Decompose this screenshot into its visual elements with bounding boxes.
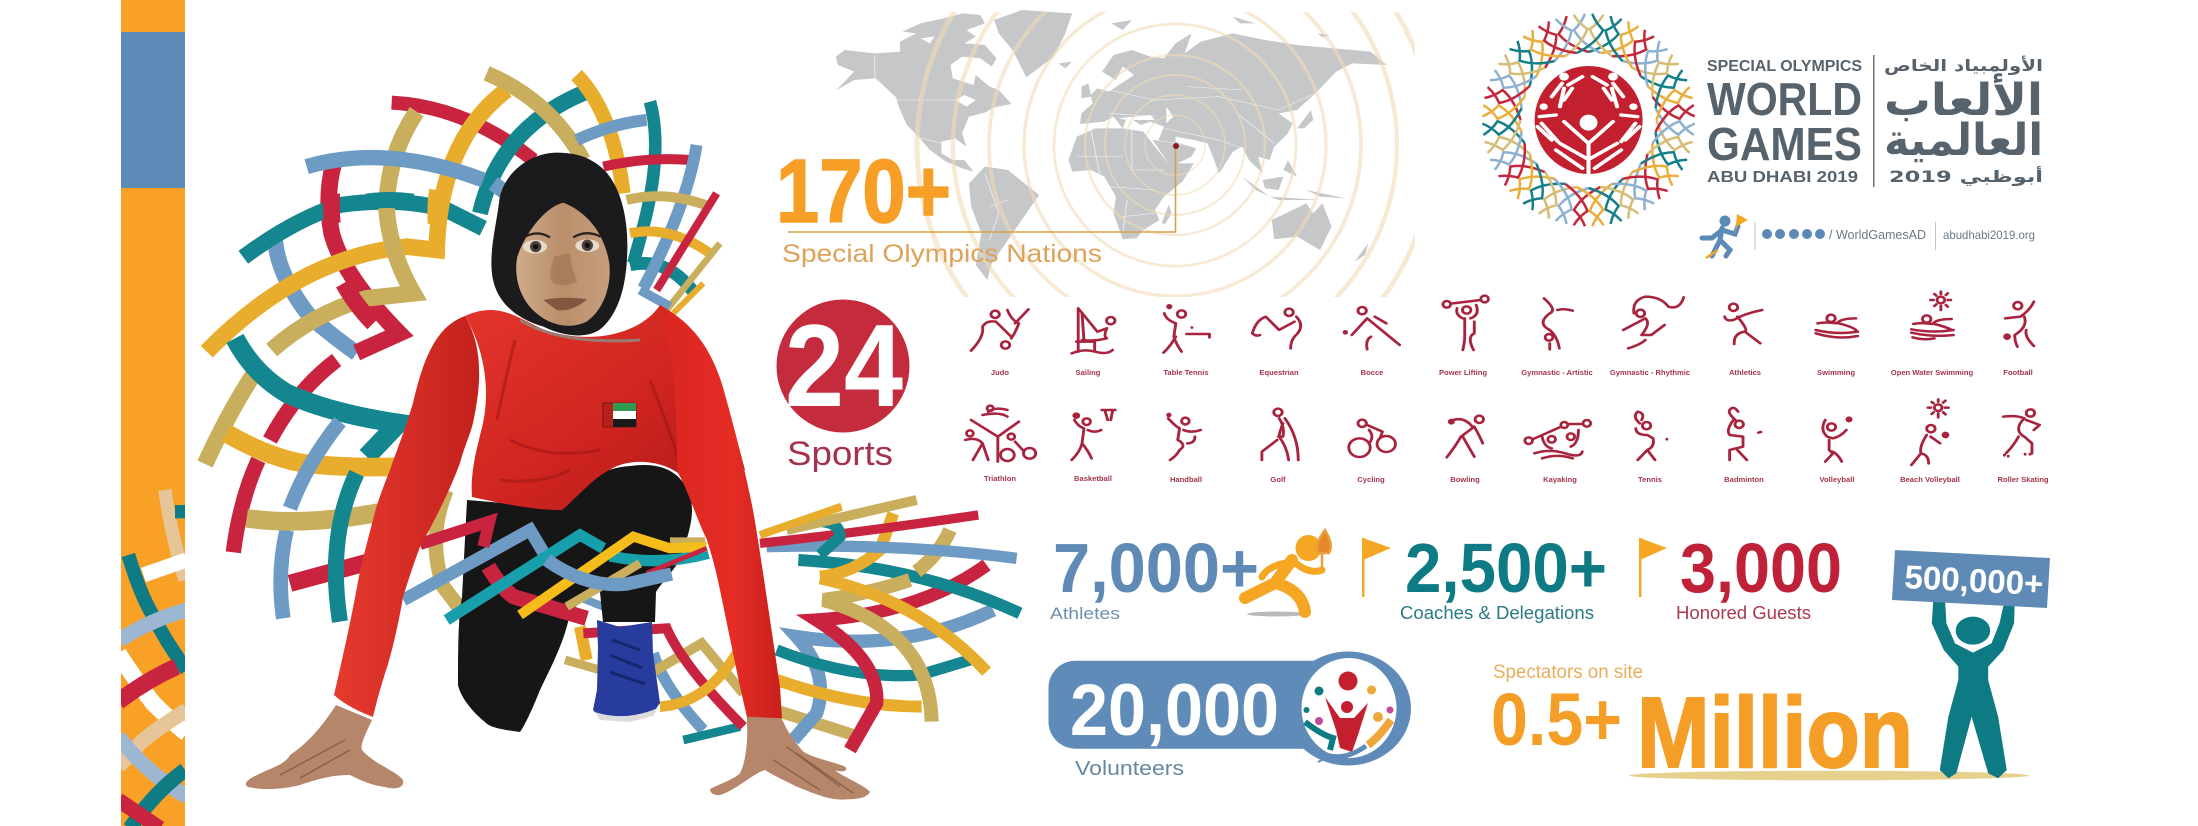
- face: [516, 203, 610, 326]
- person holding sign: [1892, 550, 2050, 778]
- icon: handball: [1166, 413, 1201, 460]
- right arm: [660, 305, 782, 719]
- icon: gymnastic rhythmic: [1623, 297, 1684, 348]
- Arabic wordmark: أبوظبي 2019: [1889, 166, 2043, 187]
- sign text: 500,000+: [1904, 558, 2044, 602]
- coaches number: 2,500+: [1405, 529, 1607, 607]
- spectators stat: [1491, 662, 2029, 789]
- English wordmark: WORLD: [1707, 73, 1862, 125]
- English wordmark: SPECIAL OLYMPICS: [1707, 58, 1862, 75]
- volunteers stat: [1048, 652, 1411, 780]
- sports labels: Cycling: [1357, 475, 1385, 484]
- continents: [836, 10, 1387, 280]
- guests caption: Honored Guests: [1676, 603, 1811, 623]
- sports labels: Judo: [991, 368, 1009, 377]
- sports labels: Swimming: [1817, 368, 1855, 377]
- sports caption: Sports: [787, 435, 893, 473]
- icon: cycling: [1349, 420, 1395, 457]
- volunteers caption: Volunteers: [1075, 758, 1184, 780]
- front ribbons over legs: [403, 522, 708, 620]
- social icons: [1762, 229, 1825, 239]
- volunteers icon: [1304, 672, 1394, 762]
- icon: tennis: [1635, 412, 1667, 460]
- social handle: / WorldGamesAD: [1829, 227, 1926, 242]
- spectators caption: Spectators on site: [1493, 662, 1643, 683]
- website: abudhabi2019.org: [1943, 228, 2035, 242]
- sports labels: Golf: [1270, 475, 1286, 484]
- coaches caption: Coaches & Delegations: [1400, 603, 1594, 623]
- right wing ribbons: [760, 500, 1020, 750]
- number 24: 24: [785, 300, 903, 431]
- sports labels: Gymnastic - Rhythmic: [1610, 368, 1690, 377]
- sports labels: Kayaking: [1543, 475, 1577, 484]
- flag patch: [603, 403, 636, 427]
- upper ribbons: [207, 73, 720, 353]
- runner with flag icon: [1702, 214, 1748, 258]
- icon: bocce: [1343, 307, 1400, 349]
- Abu Dhabi marker dot: [1173, 143, 1179, 149]
- wordmark divider: [1873, 55, 1874, 187]
- pill: [1048, 661, 1348, 749]
- Arabic wordmark: العالمية: [1884, 115, 2043, 166]
- icon: flag: [1362, 538, 1391, 597]
- sports labels: Football: [2003, 368, 2033, 377]
- guests stat: [1639, 529, 1842, 623]
- nations caption: Special Olympics Nations: [782, 240, 1102, 268]
- running shoe: [593, 620, 660, 722]
- icon: golf: [1262, 409, 1298, 460]
- sports labels: [984, 368, 2049, 484]
- sports labels: Badminton: [1724, 475, 1764, 484]
- English wordmark: ABU DHABI 2019: [1707, 169, 1858, 186]
- 24 sports badge: [776, 300, 910, 473]
- icon: open water swimming: [1911, 292, 1953, 339]
- sports labels: Athletics: [1729, 368, 1761, 377]
- sports labels: Bocce: [1361, 368, 1383, 377]
- body: [1932, 600, 2015, 778]
- sports labels: Table Tennis: [1163, 368, 1209, 377]
- icon: kayaking: [1525, 420, 1591, 458]
- icon: judo: [971, 309, 1028, 351]
- icon: volleyball: [1823, 416, 1852, 462]
- icon: gymnastic artistic: [1543, 298, 1573, 349]
- Million word: Million: [1637, 677, 1913, 789]
- icon: badminton: [1728, 408, 1761, 460]
- eyes and brows: [523, 233, 601, 253]
- icon: torch runner: [1245, 530, 1331, 616]
- social dividers: [1755, 222, 1936, 250]
- woven ring: [1481, 12, 1697, 228]
- icon: bowling: [1447, 416, 1483, 457]
- icon: sailing: [1072, 308, 1115, 353]
- ground shadow: [1629, 771, 2029, 780]
- torso: [465, 305, 745, 510]
- sports labels: Handball: [1170, 475, 1202, 484]
- ribbon fan behind athlete: [205, 73, 1020, 750]
- sports labels: Bowling: [1450, 475, 1480, 484]
- bar ribbon pattern: [118, 490, 187, 826]
- icon: football: [2003, 302, 2034, 347]
- 0.5+ number: 0.5+: [1491, 678, 1622, 761]
- sports labels: Volleyball: [1820, 475, 1854, 484]
- coaches stat: [1362, 529, 1607, 623]
- icon: triathlon: [965, 406, 1036, 462]
- Arabic wordmark: [1884, 56, 2043, 187]
- head with hijab: [491, 153, 627, 335]
- left sleeve: [334, 316, 479, 717]
- icon: basketball: [1072, 410, 1115, 460]
- Arabic wordmark: الألعاب: [1884, 73, 2043, 126]
- English wordmark: GAMES: [1707, 118, 1862, 170]
- world map: [788, 10, 1415, 297]
- right hand: [710, 717, 870, 800]
- concentric rings: [914, 12, 1415, 297]
- icon: table tennis: [1164, 304, 1209, 353]
- English wordmark: [1707, 58, 1862, 186]
- sports labels: Equestrian: [1259, 368, 1299, 377]
- sports labels: Gymnastic - Artistic: [1521, 368, 1593, 377]
- guests number: 3,000: [1680, 529, 1842, 607]
- ring centre: [1302, 658, 1396, 758]
- red emblem with figures: [1535, 66, 1643, 177]
- sports labels: Basketball: [1074, 474, 1112, 483]
- lips: [543, 298, 587, 310]
- sports labels: Tennis: [1638, 475, 1662, 484]
- middle ribbons: [205, 338, 470, 622]
- icon: power lifting: [1443, 296, 1488, 350]
- left hand: [246, 705, 403, 789]
- athletes stat: 7,000+: [1053, 529, 1259, 607]
- Arabic wordmark: الأولمبياد الخاص: [1884, 56, 2043, 75]
- nations stat: [776, 142, 1102, 268]
- sports labels: Roller Skating: [1997, 475, 2049, 484]
- ribbons behind shoe: [565, 593, 743, 740]
- trousers: [458, 465, 692, 732]
- icon: equestrian: [1252, 309, 1301, 348]
- icon: flag: [1639, 538, 1667, 597]
- collar: [520, 320, 640, 341]
- sports pictograms right: [1525, 292, 2040, 465]
- nose: [550, 253, 577, 285]
- icon: athletics: [1725, 304, 1762, 344]
- 170+ number: 170+: [776, 142, 951, 242]
- volunteers number: 20,000: [1070, 670, 1279, 751]
- left colour bar: [118, 0, 187, 826]
- icon: beach volleyball: [1911, 399, 1949, 465]
- athletes caption: Athletes: [1050, 604, 1120, 623]
- icon: swimming: [1816, 315, 1858, 337]
- sports labels: Beach Volleyball: [1900, 475, 1960, 484]
- sports labels: Sailing: [1076, 368, 1101, 377]
- sports labels: Triathlon: [984, 474, 1016, 483]
- sign: [1892, 550, 2050, 608]
- Abu Dhabi marker line: [788, 146, 1176, 232]
- ring: [1285, 652, 1411, 766]
- sports labels: Power Lifting: [1439, 368, 1487, 377]
- icon: roller skating: [2003, 409, 2040, 456]
- logo: [1481, 12, 2043, 258]
- sports labels: Open Water Swimming: [1891, 368, 1974, 377]
- athlete: [246, 153, 870, 800]
- sports pictograms row one left: [965, 296, 1488, 462]
